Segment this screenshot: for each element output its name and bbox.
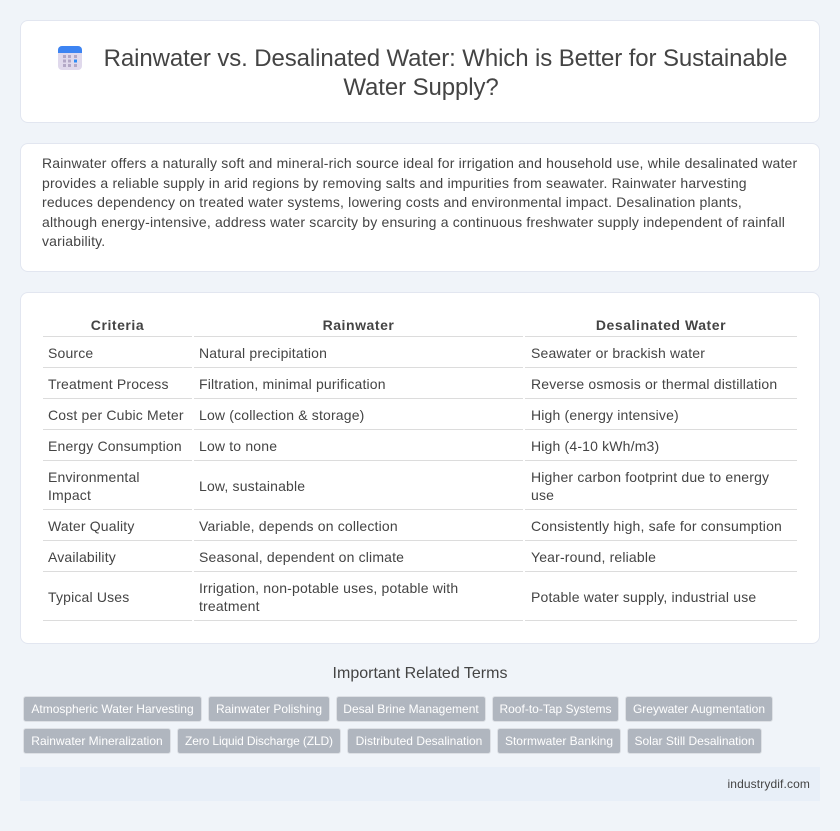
comparison table: Year-round, reliable: [531, 548, 656, 564]
comparison table: Environmental: [48, 468, 140, 484]
comparison table: Impact: [48, 486, 91, 502]
title: Water Supply?: [343, 74, 499, 101]
comparison table: Criteria: [91, 317, 144, 333]
tag: [347, 728, 491, 754]
tag: Solar Still Desalination: [634, 734, 755, 748]
panel: comparison table: [20, 292, 820, 644]
tag: [336, 696, 486, 722]
comparison table: Cost per Cubic Meter: [48, 406, 184, 422]
comparison table: High (energy intensive): [531, 406, 679, 422]
tag: [627, 728, 762, 754]
tag: Stormwater Banking: [505, 734, 613, 748]
comparison table: treatment: [199, 598, 260, 614]
comparison table: Irrigation, non-potable uses, potable with: [199, 580, 458, 596]
tag: [625, 696, 773, 722]
text block: introduction: Rainwater offers a naturally soft and mineral-rich source ideal for irrigation and household use, while desalinated water: [42, 155, 797, 171]
tag: Distributed Desalination: [356, 734, 482, 748]
text block: introduction: although energy-intensive, address water scarcity by ensuring a continuous freshwater supply independent of rainfall: [42, 214, 785, 230]
comparison table: Reverse osmosis or thermal distillation: [531, 376, 777, 392]
comparison table: Energy Consumption: [48, 438, 182, 454]
comparison table: Consistently high, safe for consumption: [531, 518, 782, 534]
title: [104, 45, 787, 101]
heading: related terms: Important Related Terms: [333, 665, 507, 682]
tag group: related terms: [23, 696, 773, 754]
tag: Rainwater Mineralization: [31, 734, 163, 748]
text block: introduction: [42, 155, 797, 249]
tag: Roof-to-Tap Systems: [499, 702, 612, 716]
comparison table: Rainwater: [323, 317, 394, 333]
icon: calendar: [58, 46, 82, 70]
comparison table: Natural precipitation: [199, 344, 327, 360]
comparison table: Treatment Process: [48, 376, 169, 392]
comparison table: Variable, depends on collection: [199, 518, 398, 534]
tag: Rainwater Polishing: [216, 702, 322, 716]
text block: introduction: provides a reliable supply in arid regions by removing salts and impurities from seawater. Rainwater harvesting: [42, 175, 747, 191]
text block: introduction: variability.: [42, 233, 105, 249]
tag: [23, 728, 171, 754]
tag: Greywater Augmentation: [633, 702, 765, 716]
tag: [497, 728, 621, 754]
comparison table: High (4-10 kWh/m3): [531, 438, 659, 454]
text block: introduction: reduces dependency on treated water systems, lowering costs and environmental impact. Desalination plants,: [42, 194, 742, 210]
comparison table: Filtration, minimal purification: [199, 376, 386, 392]
comparison table: Source: [48, 344, 93, 360]
comparison table: Low (collection & storage): [199, 406, 364, 422]
panel: introduction: [20, 143, 820, 272]
panel: title header: [20, 20, 820, 123]
tag: Atmospheric Water Harvesting: [31, 702, 194, 716]
comparison table: Typical Uses: [48, 588, 129, 604]
tag: Zero Liquid Discharge (ZLD): [185, 734, 333, 748]
tag: [177, 728, 341, 754]
comparison table: Low, sustainable: [199, 478, 305, 494]
footer: source: [20, 767, 820, 801]
comparison table: Higher carbon footprint due to energy: [531, 468, 769, 484]
comparison table: Availability: [48, 548, 116, 564]
footer: source: industrydif.com: [728, 777, 810, 791]
tag: [208, 696, 330, 722]
tag: Desal Brine Management: [343, 702, 479, 716]
comparison table: Desalinated Water: [596, 317, 726, 333]
comparison table: Seasonal, dependent on climate: [199, 548, 404, 564]
comparison table: Seawater or brackish water: [531, 344, 705, 360]
tag: [492, 696, 619, 722]
comparison table: Water Quality: [48, 518, 134, 534]
comparison table: use: [531, 486, 554, 502]
tag: [23, 696, 202, 722]
comparison table: [43, 317, 797, 621]
title: Rainwater vs. Desalinated Water: Which is Better for Sustainable: [104, 45, 787, 72]
comparison table: Potable water supply, industrial use: [531, 588, 756, 604]
comparison table: Low to none: [199, 438, 277, 454]
